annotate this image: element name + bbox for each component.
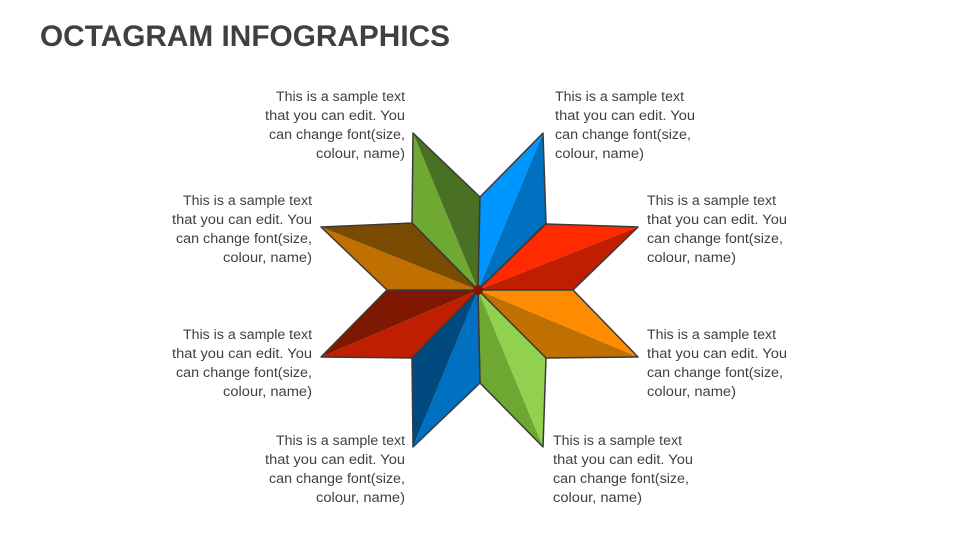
petal: right-lower orange [478,290,638,358]
text: middle-left lower [172,327,312,399]
center dot [473,285,483,295]
text: middle-left lower: This is a sample text [183,327,312,342]
text: middle-left lower: that you can edit. You [172,346,312,361]
text: middle-right lower: colour, name) [647,384,736,399]
text: middle-right lower: This is a sample text [647,327,776,342]
text: bottom-right: that you can edit. You [553,452,693,467]
text: top-left: This is a sample text [276,89,405,104]
text: bottom-left: This is a sample text [276,433,405,448]
octagram star [321,133,638,447]
text: top-left: can change font(size, [269,127,405,142]
text: bottom-left: colour, name) [316,490,405,505]
text: middle-left lower: colour, name) [223,384,312,399]
text: bottom-right: This is a sample text [553,433,682,448]
text: bottom-left: that you can edit. You [265,452,405,467]
text: middle-left upper: that you can edit. You [172,212,312,227]
text: bottom-left [265,433,405,505]
text: bottom-right: can change font(size, [553,471,689,486]
petal: left-upper brown [321,223,478,290]
text: middle-right lower [647,327,787,399]
text: middle-right upper: This is a sample text [647,193,776,208]
text: bottom-right: colour, name) [553,490,642,505]
text: bottom-right [553,433,693,505]
text: top-right [555,89,695,161]
text: middle-right upper: can change font(size, [647,231,783,246]
text: top-right: This is a sample text [555,89,684,104]
petal: bottom-left blue [412,290,480,447]
text: middle-left upper: can change font(size, [176,231,312,246]
petal: right-upper red [478,224,638,290]
text: top-left: colour, name) [316,146,405,161]
text: middle-right upper: colour, name) [647,250,736,265]
text: middle-right upper: that you can edit. You [647,212,787,227]
text: top-right: can change font(size, [555,127,691,142]
text: middle-right lower: can change font(size, [647,365,783,380]
text: middle-left upper [172,193,312,265]
text: top-right: colour, name) [555,146,644,161]
text: middle-right lower: that you can edit. You [647,346,787,361]
petal: top-left green [412,133,480,290]
text: middle-left upper: colour, name) [223,250,312,265]
text: top-left [265,89,405,161]
petal: top-right blue [478,133,546,290]
petal: left-lower dark red [321,290,478,358]
text: bottom-left: can change font(size, [269,471,405,486]
text: top-left: that you can edit. You [265,108,405,123]
petal: bottom-right light green [478,290,546,447]
text: middle-left lower: can change font(size, [176,365,312,380]
text: middle-left upper: This is a sample text [183,193,312,208]
text: middle-right upper [647,193,787,265]
text: top-right: that you can edit. You [555,108,695,123]
title: OCTAGRAM INFOGRAPHICS [40,20,450,53]
